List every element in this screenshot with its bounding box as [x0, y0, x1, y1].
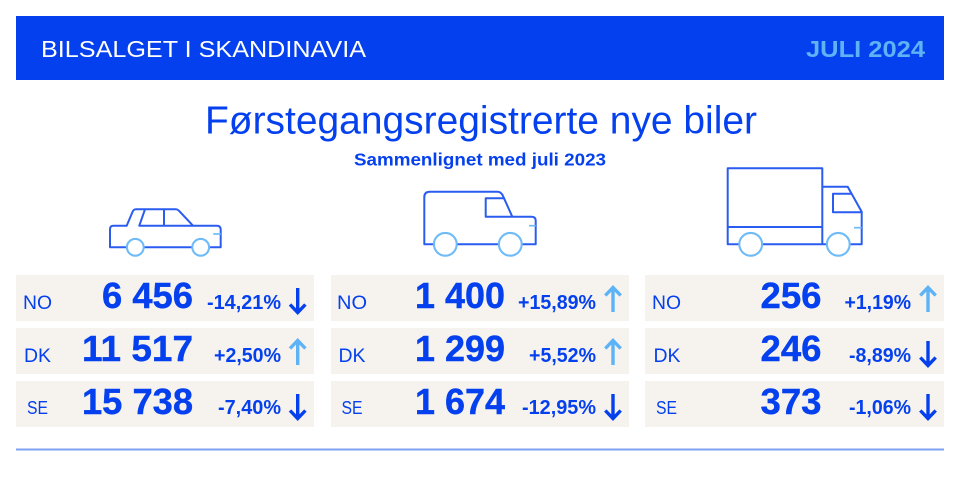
icon: car — [110, 209, 221, 256]
row: cars Denmark: DK — [24, 346, 51, 367]
row: trucks Sweden: SE — [656, 398, 677, 418]
row: trucks Sweden — [645, 381, 944, 427]
row: cars Sweden: -7,40% — [218, 397, 281, 419]
row: cars Norway: NO — [23, 293, 52, 314]
row: vans Sweden: 1 674 — [415, 381, 505, 422]
row: vans Sweden: SE — [342, 398, 362, 418]
row: vans Denmark — [331, 328, 629, 374]
row: cars Norway: -14,21% — [207, 292, 281, 314]
row: vans Norway: 1 400 — [415, 275, 505, 316]
row: vans Norway: +15,89% — [518, 292, 596, 314]
row: cars Denmark — [16, 328, 314, 374]
row: cars Norway — [16, 275, 314, 321]
row: cars Denmark: +2,50% — [214, 345, 281, 367]
row: trucks Norway: 256 — [760, 275, 822, 316]
row: trucks Sweden: 373 — [760, 381, 822, 422]
row: cars Norway: 6 456 — [102, 275, 193, 316]
row: vans Denmark: 1 299 — [415, 328, 505, 369]
table: cars — [16, 275, 314, 427]
row: trucks Norway: NO — [652, 293, 681, 314]
row: cars Sweden — [16, 381, 314, 427]
row: trucks Denmark: DK — [654, 346, 681, 367]
row: cars Sweden: SE — [27, 398, 48, 418]
table: trucks — [645, 275, 944, 427]
row: vans Sweden — [331, 381, 629, 427]
row: trucks Denmark: -8,89% — [849, 345, 911, 367]
row: trucks Sweden: -1,06% — [849, 397, 911, 419]
icon: truck — [728, 168, 862, 256]
icon: van — [424, 192, 536, 256]
row: vans Norway: NO — [337, 293, 367, 314]
row: vans Denmark: DK — [338, 346, 366, 367]
main heading: Førstegangsregistrerte nye biler — [205, 100, 757, 142]
table: vans — [331, 275, 629, 427]
row: cars Sweden: 15 738 — [82, 381, 193, 422]
row: vans Norway — [331, 275, 629, 321]
header banner — [16, 16, 944, 80]
subheading: Sammenlignet med juli 2023 — [354, 150, 606, 170]
row: cars Denmark: 11 517 — [82, 328, 193, 369]
row: vans Sweden: -12,95% — [522, 397, 596, 419]
row: trucks Denmark: 246 — [760, 328, 822, 369]
row: vans Denmark: +5,52% — [529, 345, 596, 367]
row: trucks Norway: +1,19% — [844, 292, 911, 314]
banner date: JULI 2024 — [806, 36, 925, 62]
row: trucks Denmark — [645, 328, 944, 374]
banner title: BILSALGET I SKANDINAVIA — [41, 36, 367, 62]
row: trucks Norway — [645, 275, 944, 321]
